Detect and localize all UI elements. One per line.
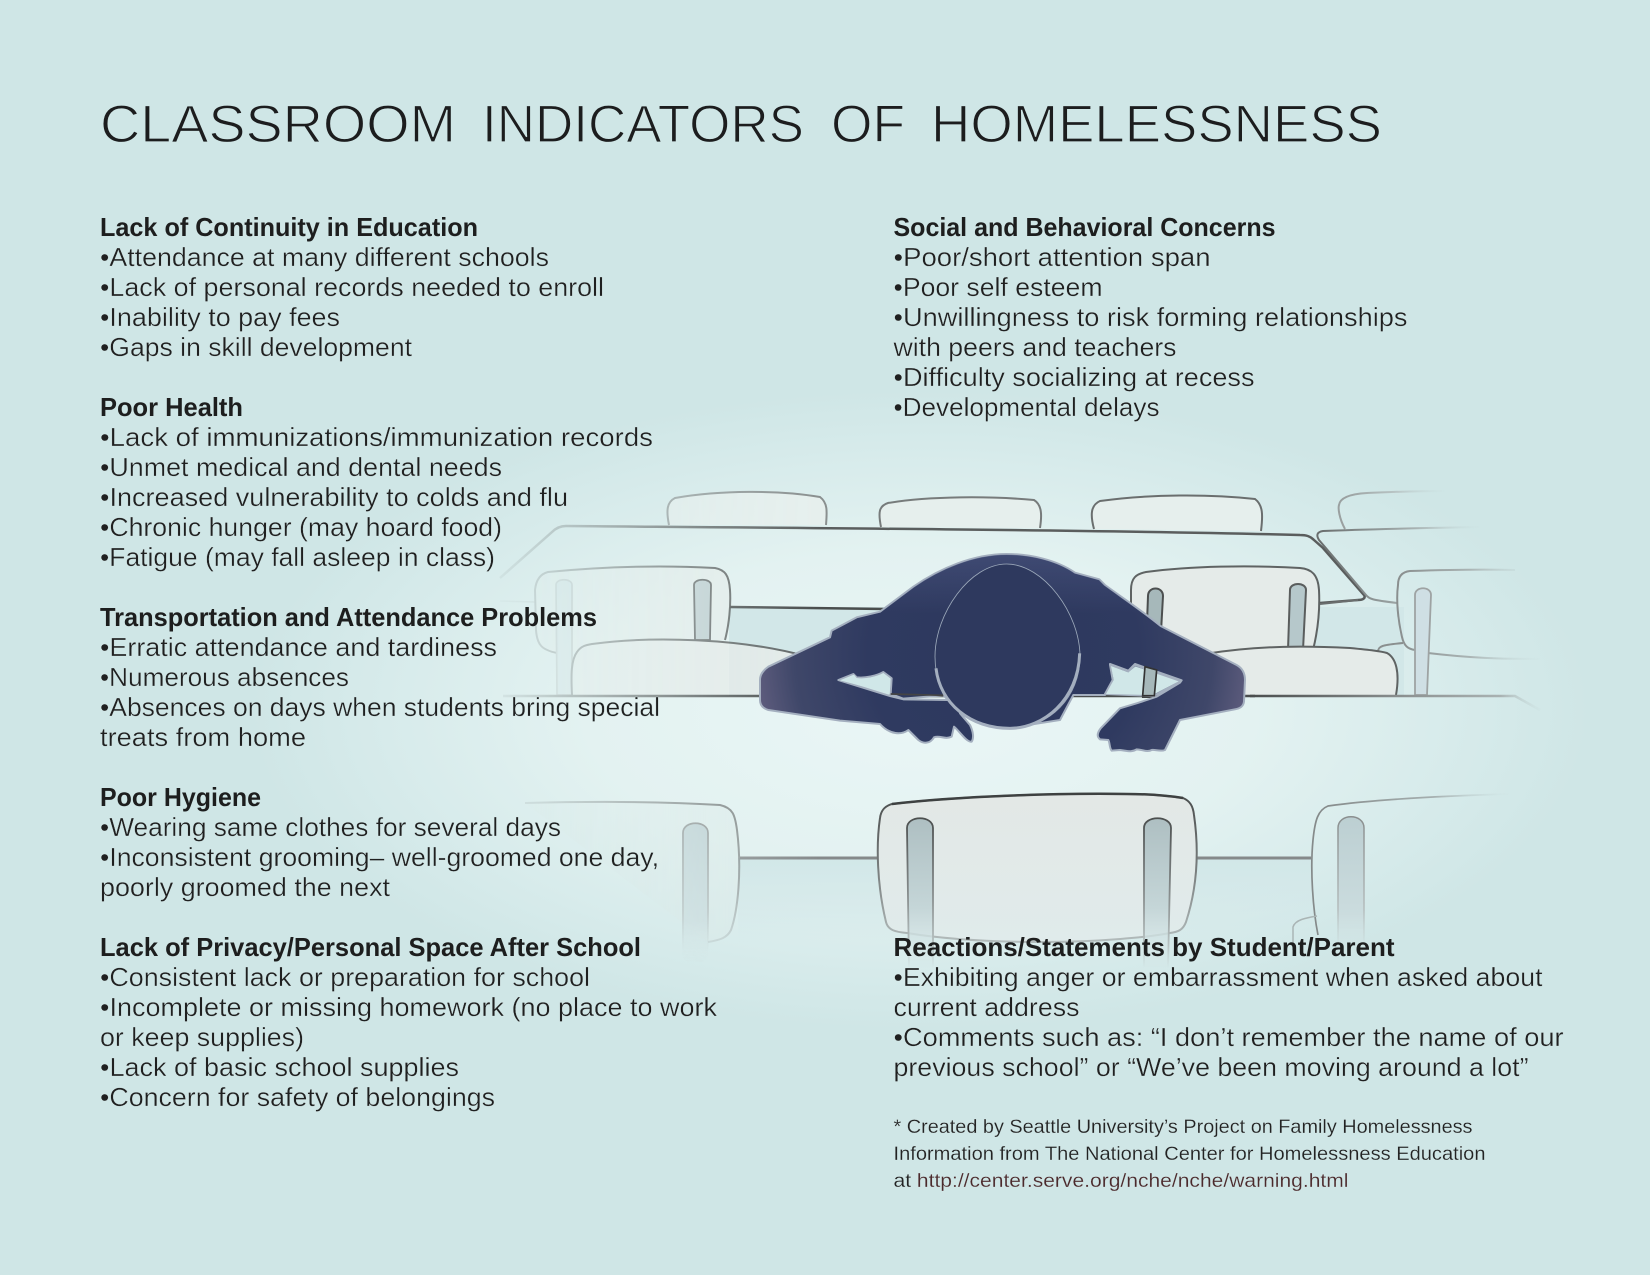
front table edge, right part <box>1250 696 1540 710</box>
section: reactions and statements: previous school” or “We’ve been moving around a lot” <box>894 1052 1528 1082</box>
section: lack of privacy: •Lack of basic school supplies <box>100 1052 459 1082</box>
footnote: * Created by Seattle University’s Project on Family Homelessness <box>894 1116 1473 1138</box>
right table <box>1316 526 1459 604</box>
left middle chair <box>535 567 730 695</box>
back table <box>500 526 1365 603</box>
section: poor hygiene <box>100 782 659 902</box>
section: lack of privacy: •Consistent lack or preparation for school <box>100 962 590 992</box>
section: social and behavioral concerns <box>892 212 1408 422</box>
section: poor hygiene: poorly groomed the next <box>100 872 391 902</box>
section: transportation and attendance problems: •Erratic attendance and tardiness <box>100 632 497 662</box>
section: reactions and statements <box>894 932 1564 1082</box>
section: transportation and attendance problems: treats from home <box>100 722 306 752</box>
right arm notch fill <box>1106 666 1179 695</box>
back row chair 1 <box>667 492 827 525</box>
footnote: Information from The National Center for Homelessness Education <box>894 1143 1486 1165</box>
section: reactions and statements: •Exhibiting anger or embarrassment when asked about <box>894 962 1543 992</box>
center rails <box>740 856 1311 860</box>
head <box>935 564 1080 728</box>
title: CLASSROOM <box>100 95 456 154</box>
head lower edge highlight <box>936 653 1080 728</box>
section: poor health: •Chronic hunger (may hoard food) <box>100 512 502 542</box>
section: lack of continuity in education: •Inability to pay fees <box>100 302 340 332</box>
title: HOMELESSNESS <box>931 95 1382 154</box>
section: poor hygiene: •Inconsistent grooming– well-groomed one day, <box>100 842 659 872</box>
heading: Poor Health <box>100 392 243 422</box>
section: lack of continuity in education: •Gaps in skill development <box>100 332 413 362</box>
heading: Lack of Privacy/Personal Space After School <box>100 932 641 962</box>
section: poor health: •Lack of immunizations/immunization records <box>100 422 653 452</box>
footnote: at http://center.serve.org/nche/nche/warning.html <box>894 1170 1348 1192</box>
left arm notch fill <box>840 673 891 693</box>
right rail <box>1320 600 1358 604</box>
section: lack of privacy: •Incomplete or missing homework (no place to work <box>100 992 718 1022</box>
central glow <box>250 390 1590 1030</box>
gap between desks, middle <box>729 607 1404 696</box>
heading: Social and Behavioral Concerns <box>894 212 1276 242</box>
left rail <box>730 607 885 609</box>
shoulder highlight <box>873 555 1140 613</box>
heading: Reactions/Statements by Student/Parent <box>894 932 1395 962</box>
section: lack of continuity in education <box>100 212 604 362</box>
title: OF <box>831 95 905 154</box>
left front seat <box>572 640 805 696</box>
front table edge, left part <box>503 695 1255 697</box>
section: lack of privacy <box>100 932 718 1112</box>
section: social and behavioral concerns: •Unwillingness to risk forming relationships <box>894 302 1408 332</box>
footnote <box>894 1116 1486 1192</box>
section: transportation and attendance problems <box>100 602 660 752</box>
right middle chair <box>1131 566 1319 697</box>
section: poor health: •Unmet medical and dental needs <box>100 452 502 482</box>
back row chair 4 <box>1338 490 1424 530</box>
heading: Lack of Continuity in Education <box>100 212 478 242</box>
heading: Poor Hygiene <box>100 782 261 812</box>
back row chair 3 <box>1092 495 1262 531</box>
illustration: student slumped over desk <box>760 554 1245 751</box>
section: transportation and attendance problems: •Numerous absences <box>100 662 349 692</box>
section: social and behavioral concerns: •Developmental delays <box>894 392 1160 422</box>
section: reactions and statements: •Comments such as: “I don’t remember the name of our <box>894 1022 1564 1052</box>
section: lack of continuity in education: •Lack of personal records needed to enroll <box>100 272 604 302</box>
left faint table edge <box>524 601 534 602</box>
heading: Transportation and Attendance Problems <box>100 602 597 632</box>
far right chair <box>1396 568 1518 695</box>
section: poor health <box>100 392 653 572</box>
section: social and behavioral concerns: •Poor/short attention span <box>894 242 1210 272</box>
gap below front desk <box>738 858 1313 942</box>
section: poor health: •Increased vulnerability to colds and flu <box>100 482 568 512</box>
title: INDICATORS <box>482 95 804 154</box>
section: lack of continuity in education: •Attendance at many different schools <box>100 242 549 272</box>
section: lack of privacy: •Concern for safety of belongings <box>100 1082 495 1112</box>
back row chair 2 <box>879 497 1041 528</box>
section: lack of privacy: or keep supplies) <box>100 1022 304 1052</box>
section: transportation and attendance problems: •Absences on days when students bring special <box>100 692 660 722</box>
section: social and behavioral concerns: •Poor self esteem <box>894 272 1102 302</box>
section: social and behavioral concerns: with peers and teachers <box>892 332 1176 362</box>
torso and arms <box>760 554 1245 751</box>
section: social and behavioral concerns: •Difficulty socializing at recess <box>894 362 1254 392</box>
right arm notch chair leg <box>1143 667 1157 696</box>
section: poor health: •Fatigue (may fall asleep in class) <box>100 542 495 572</box>
bottom left chair <box>525 802 739 963</box>
left sleeve shadow under arm <box>891 694 943 695</box>
section: poor hygiene: •Wearing same clothes for several days <box>100 812 561 842</box>
section: reactions and statements: current address <box>894 992 1080 1022</box>
bottom center chair <box>878 794 1197 968</box>
right front seat <box>1205 647 1398 696</box>
bottom right chair <box>1292 794 1488 950</box>
far right chair connector <box>1378 643 1403 652</box>
illustration: classroom desks and chairs <box>500 491 1540 968</box>
